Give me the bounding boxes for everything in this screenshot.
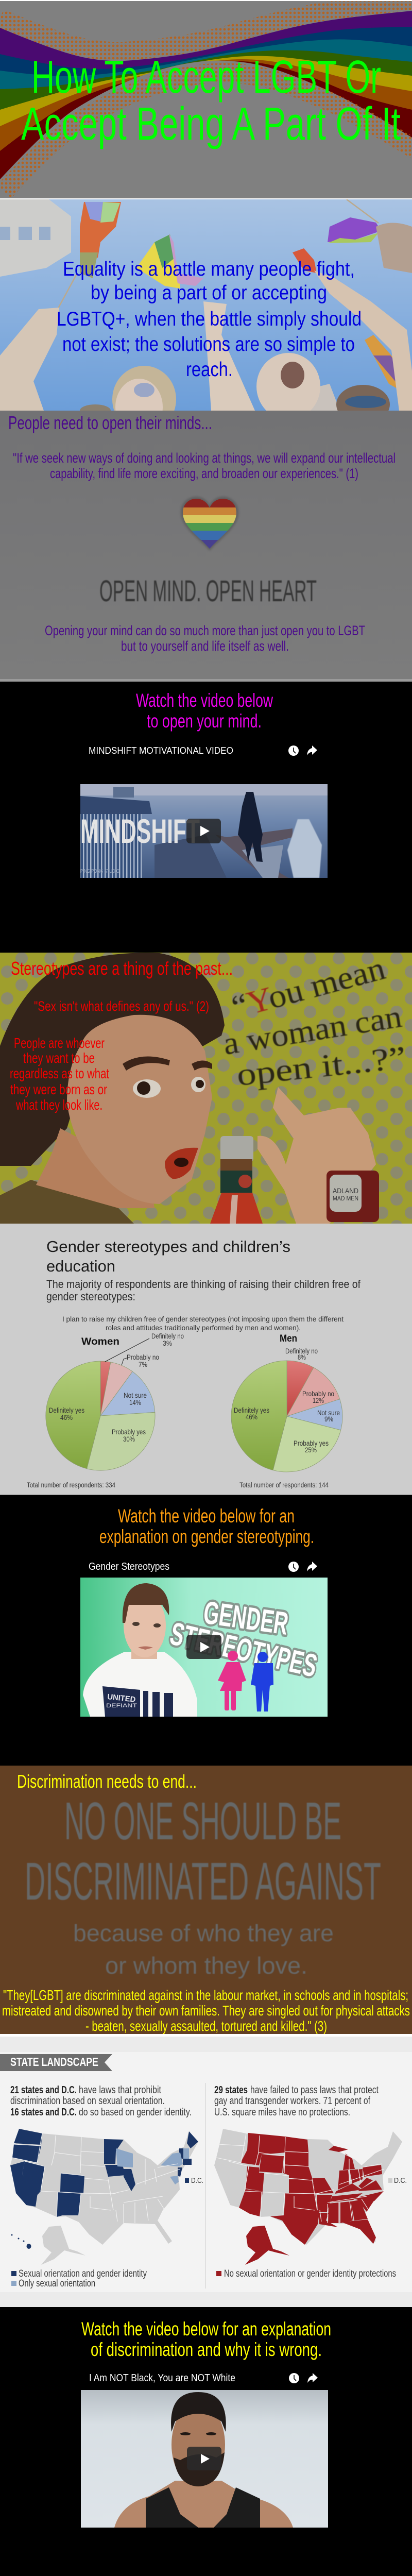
video title: I Am NOT Black, You are NOT White	[89, 2372, 235, 2384]
flag poles	[58, 199, 379, 309]
thumbnail title: STEREOTYPES	[167, 1616, 320, 1684]
intro text: LGBTQ+, when the battle simply should	[57, 308, 362, 330]
white blurred figure	[287, 819, 322, 878]
heading: Watch the video below for an	[118, 1505, 295, 1527]
face	[67, 1015, 212, 1204]
body text: regardless as to what	[10, 1065, 109, 1081]
panel: gender stereotypes chart	[0, 1224, 412, 1494]
D.C. key	[388, 2176, 407, 2185]
left text: 16 states and D.C.	[10, 2107, 77, 2118]
pie chart: women: Probably no	[127, 1353, 159, 1361]
heading: Stereotypes are a thing of the past...	[11, 958, 233, 979]
pie chart: men: 25%	[305, 1446, 317, 1454]
D.C. key: D.C.	[191, 2176, 203, 2185]
pie chart: women: 30%	[123, 1435, 135, 1443]
intro text: not exist; the solutions are so simple to	[62, 333, 355, 355]
neck and dress	[0, 1180, 134, 1224]
poster quote text	[221, 950, 408, 1093]
left text	[10, 2084, 192, 2118]
video title: MINDSHIFT MOTIVATIONAL VIDEO	[89, 745, 233, 756]
play button	[186, 1635, 221, 1659]
halftone dots below ribbon	[4, 73, 412, 192]
icon: clock	[289, 2373, 299, 2383]
heading: of discrimination and why it is wrong.	[91, 2339, 322, 2360]
pie chart: women: Probably yes	[112, 1428, 146, 1436]
map: protected states	[10, 2129, 203, 2265]
video thumbnail: MINDSHIFT	[80, 812, 200, 850]
left text: 21 states and D.C.	[10, 2084, 77, 2096]
quote	[13, 450, 396, 481]
video thumbnail	[81, 2390, 328, 2528]
mouth	[165, 1148, 198, 1179]
body text	[10, 1035, 109, 1113]
pie chart: men: Total number of respondents: 144	[239, 1481, 329, 1489]
body text: but to yourself and life itself as well.	[121, 638, 289, 654]
pie chart: women: Definitely no	[151, 1332, 184, 1340]
heading: People need to open their minds...	[8, 412, 212, 433]
body text	[45, 623, 365, 654]
video thumbnail: PING PONG STUDIO	[80, 869, 119, 874]
heading: Watch the video below	[136, 690, 273, 711]
pie chart: men	[231, 1333, 342, 1489]
TV ring	[327, 1171, 379, 1222]
TV ring: MAD MEN	[333, 1195, 358, 1202]
icon: share	[307, 1562, 317, 1571]
person	[83, 1583, 197, 1718]
right text: 29 states	[214, 2084, 248, 2096]
icon: pink woman figure	[218, 1651, 246, 1710]
panel: open minds	[0, 411, 412, 682]
figure	[238, 792, 263, 862]
poster quote text: a woman can	[221, 999, 404, 1062]
poster quote text: open it...?”	[235, 1040, 408, 1093]
thumbnail title: GENDER	[201, 1595, 290, 1642]
icon: clock	[288, 1562, 299, 1572]
panel: pride crowd photo with intro text	[0, 199, 412, 411]
chart subheading: gender stereotypes:	[46, 1290, 135, 1303]
rainbow ribbon	[0, 11, 412, 198]
icon: rainbow heart	[180, 497, 239, 551]
pie chart: women: Not sure	[124, 1391, 147, 1399]
raised arms and heads	[0, 223, 412, 435]
chart subheading	[46, 1278, 361, 1303]
video title: Gender Stereotypes	[89, 1561, 169, 1572]
right text	[214, 2084, 379, 2118]
woman illustration	[0, 953, 379, 1224]
body text: they want to be	[23, 1050, 95, 1066]
thumbnail title	[169, 1599, 318, 1679]
intro text: Equality is a battle many people fight,	[63, 258, 355, 280]
building	[0, 199, 71, 277]
poster text: or whom they love.	[105, 1952, 307, 1979]
heading: explanation on gender stereotyping.	[99, 1526, 314, 1547]
left text: do so based on gender identity.	[79, 2107, 192, 2118]
body text: they were born as or	[10, 1081, 107, 1097]
body text: what they look like.	[15, 1097, 102, 1113]
video thumbnail	[80, 1578, 328, 1718]
eyes	[133, 1077, 205, 1098]
body text: People are whoever	[14, 1035, 105, 1051]
map: unprotected states	[214, 2129, 407, 2265]
pie chart: men: Probably yes	[294, 1439, 329, 1447]
quote	[2, 1987, 410, 2034]
pie chart: men: 8%	[298, 1353, 306, 1361]
chart subheading: The majority of respondents are thinking of raising their children free of	[46, 1278, 361, 1291]
eyebrows	[123, 1056, 170, 1071]
legend: left: Only sexual orientation	[19, 2278, 95, 2289]
TV ring: ADLAND	[333, 1187, 358, 1195]
intro text: by being a part of or accepting	[91, 282, 327, 304]
video thumbnail	[80, 784, 328, 878]
pie chart: women: 46%	[60, 1413, 73, 1421]
hawaii	[11, 2234, 31, 2249]
intro text	[57, 258, 362, 381]
survey question: I plan to raise my children free of gender stereotypes (not imposing upon them the different	[62, 1315, 344, 1323]
heading	[99, 1505, 314, 1547]
pie chart: men: 46%	[246, 1413, 258, 1421]
flags	[80, 202, 412, 394]
pie chart: women: Women	[81, 1336, 119, 1347]
D.C. key	[185, 2176, 203, 2185]
poster text	[25, 1791, 381, 1979]
quote: - beaten, sexually assaulted, tortured and killed." (3)	[85, 2018, 327, 2034]
legend: left	[11, 2268, 147, 2289]
pie chart: men: Men	[280, 1333, 297, 1344]
survey question: roles and attitudes traditionally performed by men and women).	[106, 1324, 301, 1332]
chart heading: education	[46, 1257, 115, 1275]
pie chart: men: 9%	[324, 1415, 333, 1423]
pie chart: men: Definitely no	[285, 1347, 318, 1355]
title	[21, 52, 401, 150]
person: UNITED	[107, 1692, 136, 1704]
pie chart: women	[27, 1332, 184, 1489]
hair	[0, 953, 225, 1166]
bottle	[210, 1136, 263, 1224]
poster text: because of who they are	[73, 1920, 334, 1946]
pie chart: men: Definitely yes	[234, 1406, 269, 1414]
legend: left: Sexual orientation and gender identity	[19, 2268, 147, 2279]
hand	[258, 1087, 376, 1224]
pie chart: women: 7%	[139, 1360, 147, 1368]
panel: video two	[0, 1495, 412, 1766]
play button	[187, 2447, 221, 2470]
person: DEFIANT	[106, 1703, 137, 1709]
icon: blue man figure	[251, 1652, 273, 1711]
man	[114, 2392, 293, 2528]
right text: U.S. square miles have no protections.	[214, 2107, 350, 2118]
heading: Discrimination needs to end...	[17, 1771, 197, 1792]
banner: state landscape: STATE LANDSCAPE	[10, 2055, 98, 2069]
icon: share	[307, 745, 317, 755]
pie chart: men: 12%	[313, 1396, 324, 1404]
pie chart: men: Probably no	[302, 1389, 334, 1398]
right text: have failed to pass laws that protect	[250, 2084, 379, 2096]
building ledge	[215, 828, 293, 878]
pie chart: women: Definitely yes	[49, 1406, 84, 1414]
panel: title banner	[0, 1, 412, 198]
chart heading: Gender stereotypes and children’s	[46, 1238, 290, 1256]
banner: state landscape	[0, 2054, 112, 2071]
icon: share	[307, 2373, 318, 2383]
play button	[186, 819, 221, 843]
panel: discrimination	[0, 1766, 412, 2034]
panel: stereotypes poster	[0, 953, 412, 1224]
icon: clock	[288, 745, 299, 756]
intro text: reach.	[186, 359, 233, 381]
heading	[136, 690, 273, 732]
right text: gay and transgender workers. 71 percent of	[214, 2095, 370, 2107]
pie chart: women: 3%	[163, 1339, 172, 1347]
left text: discrimination based on sexual orientation.	[10, 2095, 165, 2107]
survey question	[62, 1315, 344, 1332]
pie chart: women: Total number of respondents: 334	[27, 1481, 115, 1489]
poster quote text: “You mean	[228, 953, 389, 1026]
halftone dots above ribbon	[0, 1, 412, 51]
panel: state landscape maps	[0, 2037, 412, 2307]
quote: "Sex isn't what defines any of us." (2)	[34, 998, 209, 1014]
pie chart: women: 14%	[129, 1398, 141, 1406]
heading: to open your mind.	[147, 710, 262, 732]
left text: have laws that prohibit	[79, 2084, 161, 2096]
chart heading	[46, 1238, 290, 1275]
panel: video one	[0, 682, 412, 953]
heading	[81, 2318, 331, 2360]
pie chart: men: Not sure	[317, 1409, 340, 1417]
D.C. key: D.C.	[394, 2176, 407, 2185]
panel: video three	[0, 2307, 412, 2576]
